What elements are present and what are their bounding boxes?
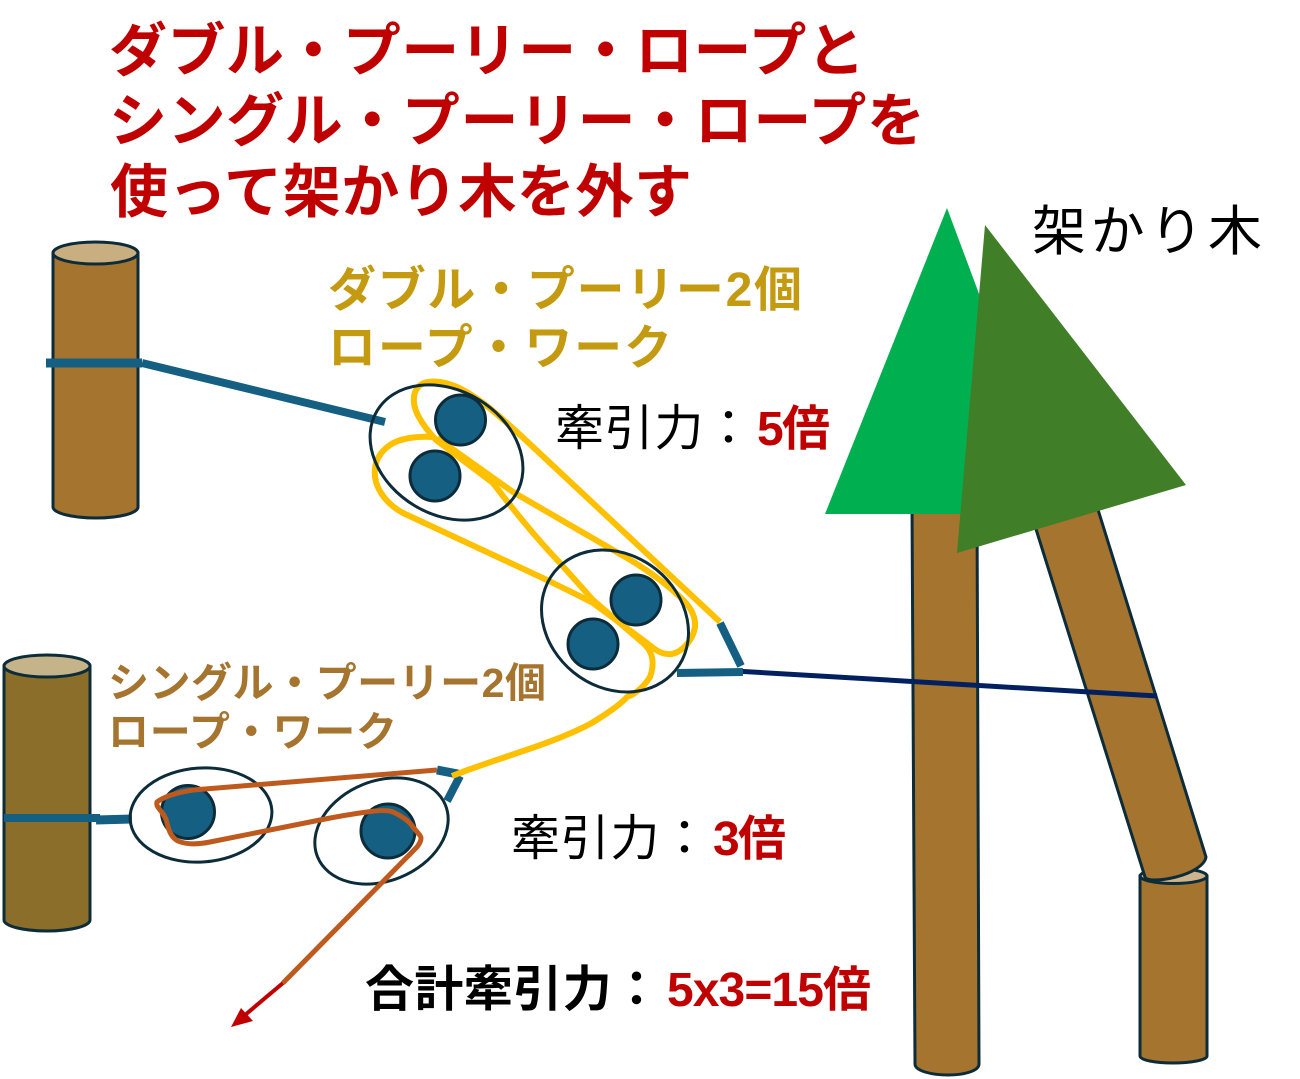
- pulley wheel: [611, 575, 661, 625]
- brown label: single pulley: シングル・プーリー2個: [108, 660, 546, 706]
- title: ダブル・プーリー・ロープと: [109, 19, 865, 84]
- brown label: single pulley: [108, 660, 546, 755]
- title: シングル・プーリー・ロープを: [109, 89, 925, 154]
- pulling force 3x: 牽引力：: [511, 812, 709, 866]
- right hook: [677, 623, 743, 673]
- left single pulley block: [127, 763, 275, 867]
- single pulley rope: [157, 770, 437, 983]
- upper anchor rope: [46, 363, 385, 422]
- upper anchor post: [53, 242, 138, 518]
- pulling force 3x: 3倍: [713, 813, 786, 866]
- middle pulley block: [513, 521, 717, 721]
- yellow rope end: [452, 769, 470, 776]
- gold label: double pulley: ダブル・プーリー2個: [328, 264, 802, 317]
- navy rope to leaning tree: [735, 671, 1157, 696]
- label: hung-up tree: 架かり木: [1032, 202, 1262, 262]
- gold label: double pulley: [328, 264, 802, 375]
- title: 使って架かり木を外す: [110, 160, 692, 225]
- upper pulley block: [345, 358, 548, 547]
- right single pulley block: [299, 759, 464, 903]
- total pulling force: [365, 963, 871, 1017]
- lower anchor post: [4, 655, 90, 931]
- pulling force 5x: 5倍: [757, 403, 830, 456]
- stump: [1140, 868, 1207, 1063]
- pulley wheel: [436, 395, 486, 445]
- lower anchor rope: [4, 818, 132, 820]
- double pulley ropes: [375, 382, 720, 776]
- pull arrow: [231, 983, 283, 1027]
- total pulling force: 5x3=15倍: [667, 964, 871, 1017]
- brown label: single pulley: ロープ・ワーク: [108, 709, 397, 755]
- lower hook: [437, 770, 460, 801]
- pulley wheel: [361, 804, 415, 858]
- standing tree crown: [825, 208, 1000, 514]
- leaning tree crown: [957, 225, 1186, 553]
- pulley wheel: [162, 786, 214, 838]
- title: [109, 19, 925, 225]
- pulley wheel: [568, 619, 618, 669]
- pulling force 5x: 牽引力：: [555, 402, 753, 456]
- leaning tree trunk: [1030, 500, 1206, 880]
- gold label: double pulley: ロープ・ワーク: [328, 322, 672, 375]
- pulley wheel: [410, 451, 460, 501]
- standing tree trunk: [912, 505, 979, 1075]
- total pulling force: 合計牽引力：: [365, 963, 661, 1017]
